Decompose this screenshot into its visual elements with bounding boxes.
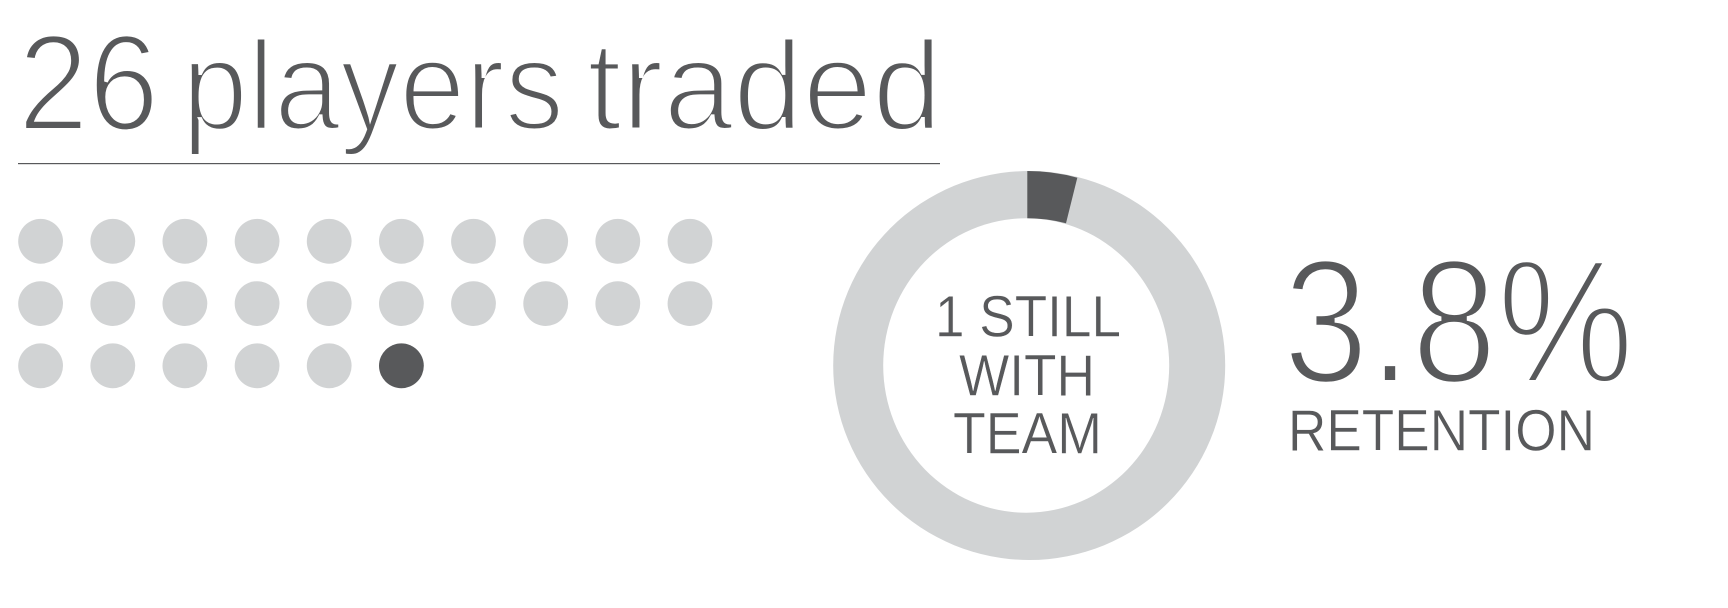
- title: [18, 7, 942, 160]
- donut centre label: WITH: [959, 344, 1095, 408]
- title: players: [182, 14, 564, 156]
- title: traded: [587, 14, 942, 156]
- retention percentage: 3.8%: [1283, 222, 1634, 420]
- donut centre label: TEAM: [953, 402, 1102, 466]
- donut chart: retention share: [833, 171, 1225, 560]
- retention label: RETENTION: [1288, 398, 1595, 464]
- donut centre label: [935, 284, 1121, 466]
- title: 26: [18, 7, 159, 160]
- dot grid: 26 players, 1 highlighted: [18, 219, 712, 388]
- donut centre label: 1 STILL: [935, 284, 1121, 350]
